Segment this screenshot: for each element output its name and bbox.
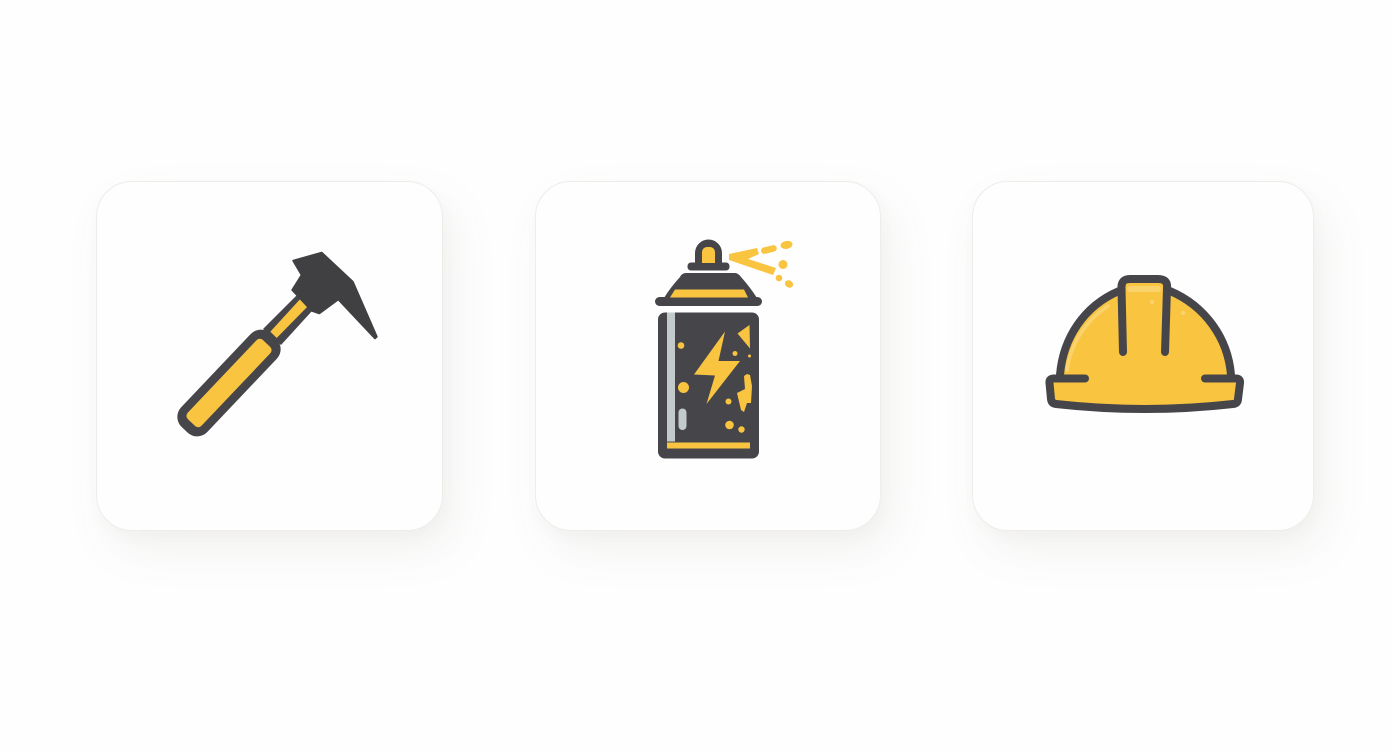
hammer handle <box>172 324 286 442</box>
icon: hammer <box>177 252 378 436</box>
hammer head <box>292 253 377 338</box>
paint splatter <box>678 325 752 433</box>
can body <box>658 312 759 458</box>
spray cap <box>655 240 762 306</box>
panel: spray can card <box>535 181 881 531</box>
helmet dome <box>1060 279 1232 392</box>
panel: hard hat card <box>972 181 1314 531</box>
hammer neck <box>263 295 312 345</box>
icon: spray can <box>655 240 794 458</box>
helmet centre ridge <box>1121 279 1167 352</box>
can bottom band <box>667 442 750 448</box>
lightning bolt <box>694 332 740 404</box>
helmet brim <box>1049 378 1240 409</box>
icon: hard hat <box>1045 275 1244 413</box>
panel: hammer card <box>96 181 443 531</box>
spray droplets <box>729 240 794 289</box>
helmet glints <box>1127 286 1185 315</box>
can highlight strip <box>667 312 686 442</box>
